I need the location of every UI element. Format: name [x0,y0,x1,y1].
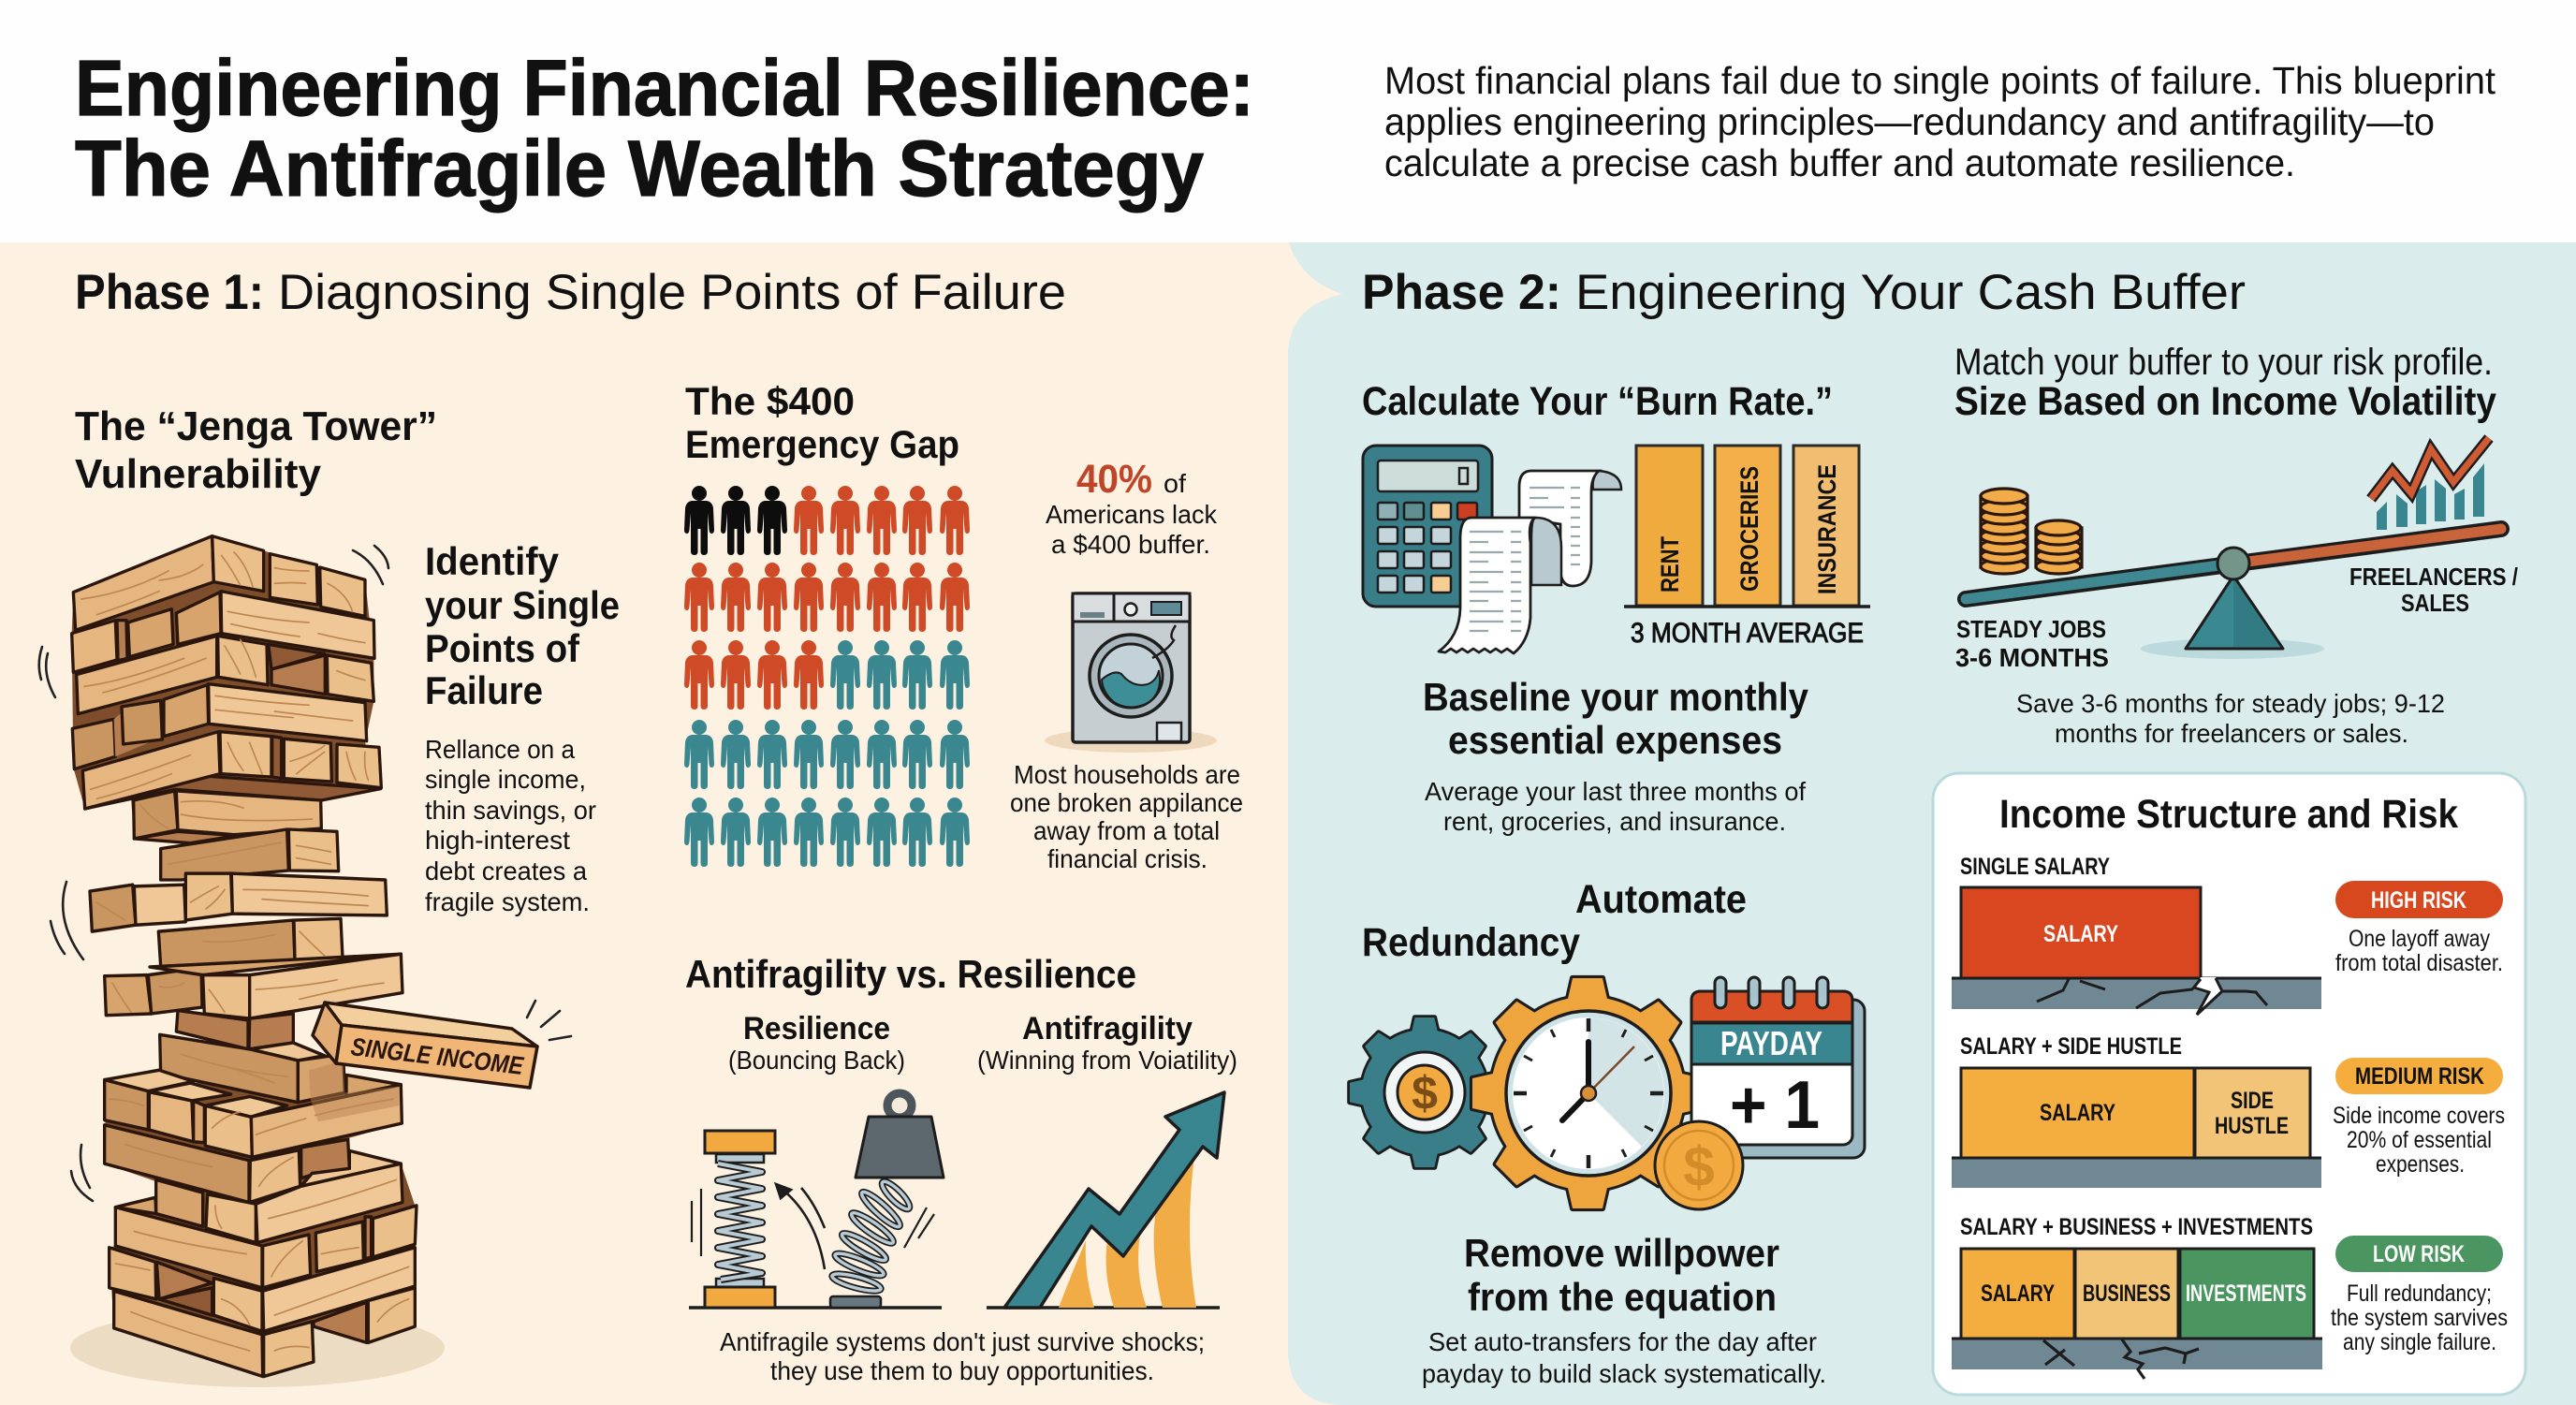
row: salary + business + investments: the system sarvives [2331,1305,2508,1331]
label: antifragility [977,1011,1237,1075]
row: single salary: One layoff away [2349,926,2490,952]
text block: identify single points of failure: high-interest [425,826,570,855]
label: antifragility: (Winning from Voiatility) [977,1046,1237,1075]
label: resilience: Resilience [743,1011,890,1046]
text block: identify single points of failure: Identify [425,539,560,583]
text block: baseline expenses: essential expenses [1448,718,1782,762]
people: red [684,486,970,710]
row: salary + side hustle: Side income covers [2333,1103,2505,1129]
chart: three month average bars [1624,446,1870,649]
panel: phase 1 background [0,242,1404,1405]
row: single salary: HIGH RISK [2371,887,2466,914]
heading: phase 1: Phase 1: [75,265,264,320]
caption: save months [2016,689,2445,748]
text block: baseline expenses [1423,675,1809,836]
text block: remove willpower: Set auto-transfers for the day after [1428,1327,1817,1356]
row: salary + business + investments: LOW RISK [2373,1241,2465,1267]
row: salary + side hustle: expenses. [2376,1151,2465,1178]
caption: save months: Save 3-6 months for steady jobs; 9-12 [2016,689,2445,718]
row: salary + side hustle: SALARY + SIDE HUSTLE [1960,1033,2182,1060]
heading: phase 1: Diagnosing Single Points of Failure [278,265,1066,320]
caption: save months: months for freelancers or sales. [2055,719,2408,748]
coin stacks [1981,489,2082,574]
heading: automate redundancy: Redundancy [1362,920,1580,965]
row: salary + side hustle: 20% of essential [2347,1127,2492,1153]
text block: broken appliance [1010,760,1243,873]
row: single salary: SALARY [2043,921,2118,947]
label: antifragility: Antifragility [1022,1011,1193,1046]
upper tower blocks [72,536,381,880]
wood grain lower [96,886,409,1351]
heading: automate redundancy [1362,877,1747,965]
text block: identify single points of failure: Failure [425,668,543,712]
chart: antifragile arrow [987,1092,1224,1308]
label: freelancers / sales: FREELANCERS / [2349,563,2518,591]
text block: identify single points of failure: fragile system. [425,887,590,916]
text block: baseline expenses: Average your last three months of [1425,777,1806,806]
lower tower blocks [90,873,417,1377]
heading: $400 emergency gap: Emergency Gap [685,422,959,466]
bar: groceries [1715,446,1780,606]
icon: payday calendar: PAYDAY [1720,1024,1822,1062]
block: single income [313,1003,537,1088]
text block: remove willpower: payday to build slack systematically. [1422,1359,1826,1388]
icon: receipts [1439,471,1621,653]
text block: remove willpower: Remove willpower [1464,1231,1779,1275]
row: salary + side hustle: SIDE [2231,1088,2274,1114]
heading: jenga tower vulnerability [75,403,437,497]
chart: people grid 40 of 100 [684,486,970,867]
row: salary + side hustle [1952,1033,2505,1188]
intro text: applies engineering principles—redundancy and antifragility—to [1384,100,2435,143]
text block: broken appliance: away from a total [1033,816,1220,845]
heading: jenga tower vulnerability: Vulnerability [75,451,322,497]
stat: 40 percent: of [1164,469,1186,498]
title: Engineering Financial Resilience: [75,44,1254,132]
header band [0,0,2576,243]
card heading: Income Structure and Risk [1999,792,2458,837]
text block: remove willpower: from the equation [1468,1275,1777,1319]
row: salary + business + investments: INVESTMENTS [2186,1281,2306,1307]
bar: rent: RENT [1656,536,1684,593]
text block: broken appliance: one broken appilance [1010,788,1243,817]
icon: payday calendar: + 1 [1730,1068,1820,1143]
row: salary + business + investments: SALARY [1981,1281,2055,1307]
heading: antifragility vs resilience: Antifragility vs. Resilience [685,952,1136,996]
label: freelancers / sales [2349,563,2518,617]
text block: identify single points of failure: Rellance on a [425,735,575,764]
text block: identify single points of failure [425,539,620,916]
text block: baseline expenses: rent, groceries, and insurance. [1443,807,1786,836]
heading: size based on income volatility: Match your buffer to your risk profile. [1954,342,2493,383]
arrow: spring rebound [776,1184,825,1269]
icon: spring under weight [830,1093,944,1308]
heading: automate redundancy: Automate [1575,877,1747,922]
text block: remove willpower [1422,1231,1826,1388]
heading: $400 emergency gap [685,379,959,466]
heading: phase 2: Engineering Your Cash Buffer [1575,265,2246,320]
row: salary + side hustle: SALARY [2040,1100,2115,1126]
volatile bars and line [2377,463,2484,530]
text block: identify single points of failure: thin savings, or [425,796,596,825]
row: salary + business + investments [1952,1214,2508,1379]
text block: baseline expenses: Baseline your monthly [1423,675,1809,719]
label: freelancers / sales: SALES [2401,589,2469,617]
label: resilience: (Bouncing Back) [728,1046,905,1075]
bar: insurance [1793,446,1859,606]
stat: 40 percent: Americans lack [1046,500,1218,529]
title [75,44,1254,212]
heading: size based on income volatility: Size Based on Income Volatility [1954,379,2496,424]
text block: identify single points of failure: Points of [425,626,580,670]
heading: $400 emergency gap: The $400 [685,379,855,423]
panel: phase 2 background [1288,242,2576,1405]
motion lines around tower [39,546,571,1201]
heading: phase 2: Phase 2: [1362,265,1561,320]
shadow under tower [70,1309,445,1387]
label: resilience [728,1011,905,1075]
text block: broken appliance: Most households are [1014,760,1240,789]
icon: teal gear with dollar: $ [1412,1067,1438,1120]
icon: resilient spring [689,1131,942,1308]
block: single income: SINGLE INCOME [349,1032,525,1080]
bar: insurance: INSURANCE [1813,464,1841,594]
row: salary + side hustle: MEDIUM RISK [2355,1063,2484,1090]
icon: calculator [1363,446,1492,607]
caption: antifragile: Antifragile systems don't just survive shocks; [720,1327,1205,1356]
icon: teal gear with dollar [1350,1017,1500,1167]
icon: payday calendar [1691,977,1865,1158]
text block: identify single points of failure: your Single [425,583,620,627]
text block: identify single points of failure: debt creates a [425,856,587,885]
heading: size based on income volatility [1954,342,2496,424]
seesaw beam [1966,529,2501,599]
icon: seesaw with coins and chart [1966,438,2501,659]
label: steady jobs: 3-6 MONTHS [1955,643,2109,672]
bar: rent [1636,446,1703,606]
text block: identify single points of failure: single income, [425,765,586,794]
icon: clock in orange gear [1472,978,1703,1208]
stat: 40 percent: a $400 buffer. [1051,530,1210,559]
intro text: calculate a precise cash buffer and automate resilience. [1384,141,2295,184]
row: salary + business + investments: SALARY + BUSINESS + INVESTMENTS [1960,1214,2313,1240]
people: teal [684,640,970,867]
heading: burn rate: Calculate Your “Burn Rate.” [1362,379,1833,424]
label: steady jobs [1955,615,2109,672]
stat: 40 percent [1046,457,1218,559]
bar: groceries: GROCERIES [1735,466,1764,592]
title: The Antifragile Wealth Strategy [75,124,1204,212]
intro text: Most financial plans fail due to single points of failure. This blueprint [1384,59,2496,102]
wood grain upper [81,552,368,864]
row: salary + business + investments: Full redundancy; [2347,1281,2492,1307]
panel: income structure and risk [1933,773,2525,1395]
caption: antifragile [720,1327,1205,1385]
row: salary + business + investments: any single failure. [2343,1329,2496,1355]
stat: 40 percent: 40% [1076,457,1152,502]
caption: antifragile: they use them to buy opportunities. [770,1356,1154,1385]
people: black [684,486,787,555]
row: single salary: SINGLE SALARY [1960,854,2110,880]
icon: dollar coin [1655,1121,1743,1209]
intro text [1384,59,2496,184]
row: salary + side hustle: HUSTLE [2215,1113,2289,1139]
heading: jenga tower vulnerability: The “Jenga Tower” [75,403,437,449]
row: salary + business + investments: BUSINESS [2083,1281,2171,1307]
chart: three month average bars: 3 MONTH AVERAGE [1631,618,1864,649]
illustration: jenga tower [39,536,571,1387]
row: single salary [1952,854,2503,1015]
icon: dollar coin: $ [1683,1135,1715,1198]
icon: broken washing machine [1045,593,1217,753]
label: steady jobs: STEADY JOBS [1956,615,2106,643]
row: single salary: from total disaster. [2335,950,2503,976]
text block: broken appliance: financial crisis. [1047,844,1208,873]
